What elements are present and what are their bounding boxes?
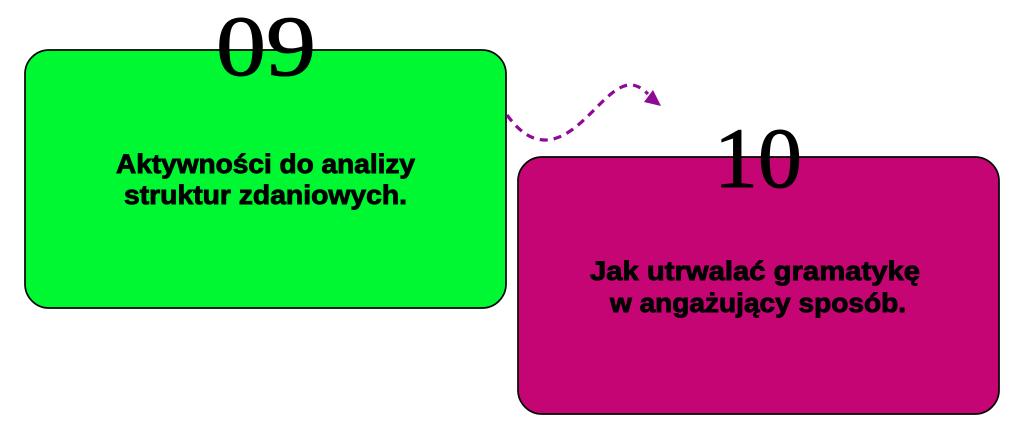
card background green — [25, 50, 506, 308]
card 10 text: Jak utrwalać gramatykę — [590, 256, 920, 286]
number 09: 09 — [216, 0, 316, 94]
card 10 text — [590, 256, 920, 318]
card 09 text — [116, 149, 415, 210]
panel: card 09 — [25, 0, 506, 308]
number 10: 10 — [714, 110, 802, 206]
card background magenta — [518, 157, 999, 414]
card 10 text: w angażujący sposób. — [609, 288, 906, 318]
arrow: dashed curved connector — [507, 85, 661, 140]
panel: card 10 — [518, 110, 999, 414]
card 09 text: struktur zdaniowych. — [124, 180, 407, 210]
card 09 text: Aktywności do analizy — [116, 149, 415, 179]
